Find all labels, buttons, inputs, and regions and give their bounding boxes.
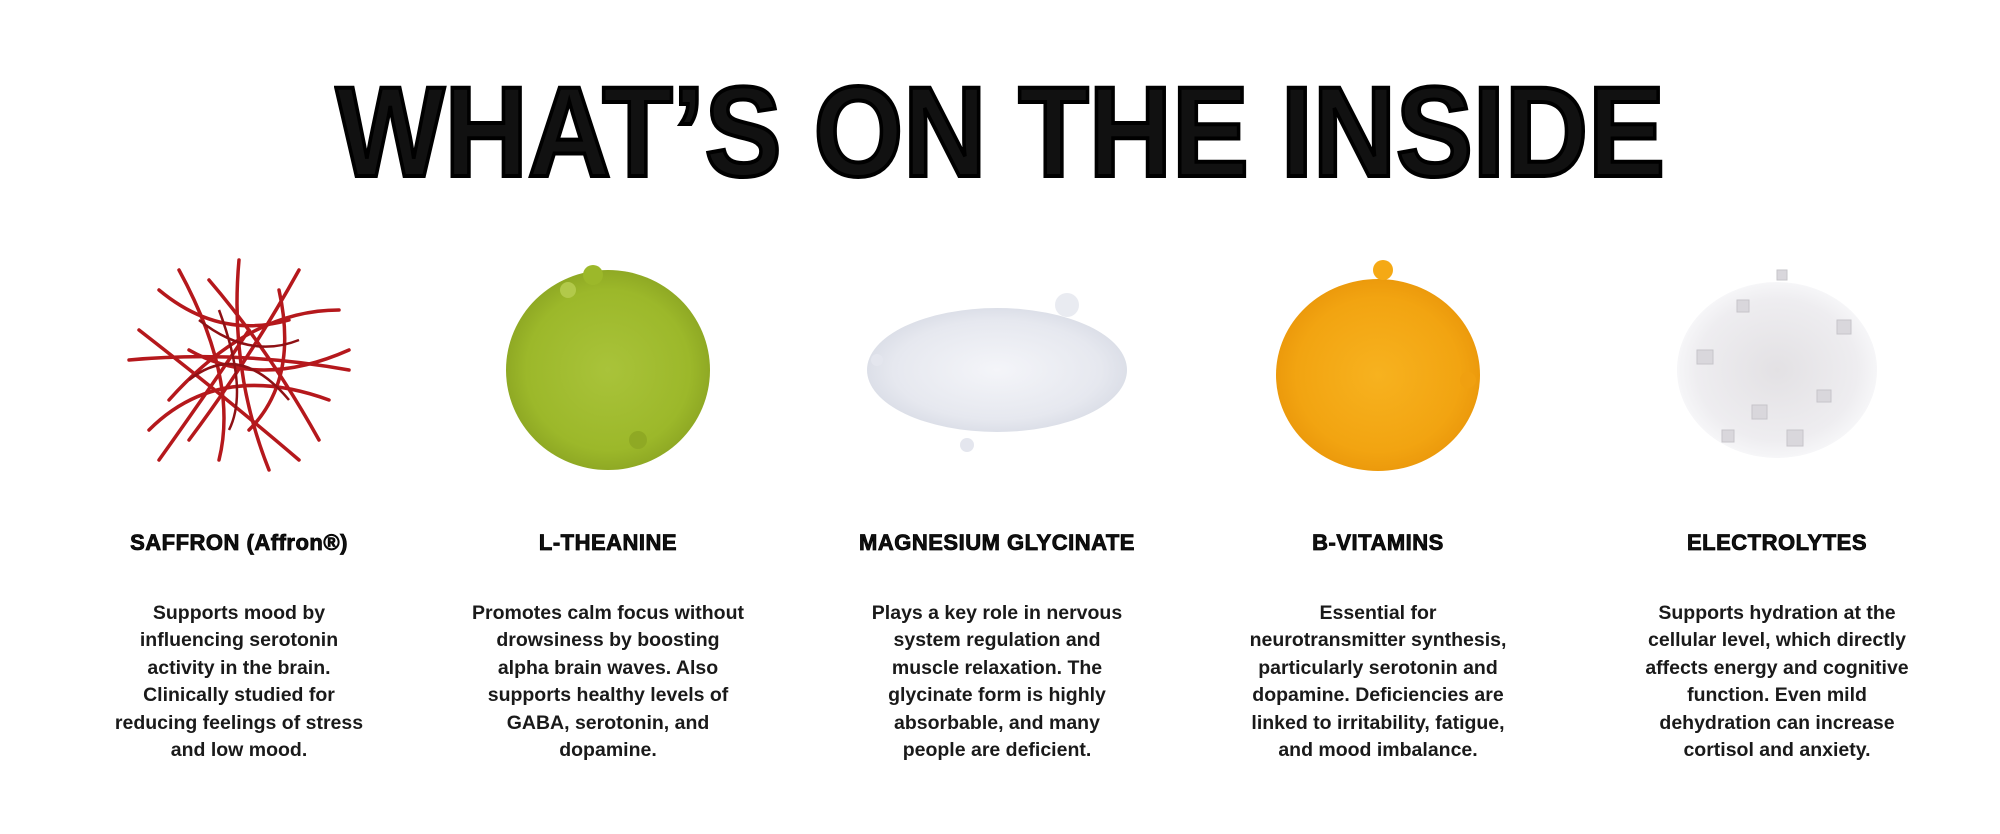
text: reducing feelings of stress [115,712,363,734]
image: salt crystals [1677,270,1877,458]
text: affects energy and cognitive [1645,657,1909,679]
image: saffron threads [127,258,351,472]
text: absorbable, and many [894,712,1100,734]
text: particularly serotonin and [1258,657,1498,679]
text: Essential for [1319,602,1437,624]
text: linked to irritability, fatigue, [1251,712,1505,734]
text: activity in the brain. [147,657,331,679]
panel: magnesium [859,293,1135,761]
text: glycinate form is highly [888,684,1106,706]
image: white powder [867,293,1127,452]
text: cortisol and anxiety. [1683,739,1871,761]
text: supports healthy levels of [488,684,728,706]
text: Plays a key role in nervous [872,602,1122,624]
panel: saffron [115,258,363,761]
text: dopamine. [559,739,657,761]
heading: B-VITAMINS [1312,530,1444,555]
text: Clinically studied for [143,684,335,706]
heading: SAFFRON (Affron®) [130,530,348,555]
text: Supports mood by [153,602,325,624]
panel: b-vitamins [1250,260,1506,761]
text: function. Even mild [1687,684,1867,706]
text: drowsiness by boosting [496,629,720,651]
heading: L-THEANINE [539,530,677,555]
text: alpha brain waves. Also [498,657,718,679]
panel: l-theanine [472,265,744,761]
text [115,602,363,761]
text: GABA, serotonin, and [507,712,709,734]
image: green powder [506,265,710,470]
text: people are deficient. [903,739,1091,761]
panel: electrolytes [1645,270,1909,761]
text: cellular level, which directly [1648,629,1906,651]
text: Promotes calm focus without [472,602,744,624]
heading: ELECTROLYTES [1687,530,1867,555]
text: Supports hydration at the [1658,602,1896,624]
image: orange powder [1276,260,1480,471]
text: influencing serotonin [140,629,338,651]
text [1645,602,1909,761]
text [472,602,744,761]
text: muscle relaxation. The [892,657,1102,679]
text [872,602,1122,761]
text: and low mood. [171,739,307,761]
text: neurotransmitter synthesis, [1250,629,1506,651]
text [1250,602,1506,761]
text: system regulation and [894,629,1100,651]
heading: MAGNESIUM GLYCINATE [859,530,1135,555]
text: dopamine. Deficiencies are [1252,684,1504,706]
text: and mood imbalance. [1278,739,1478,761]
title: WHAT’S ON THE INSIDE [335,61,1665,204]
text: dehydration can increase [1659,712,1895,734]
